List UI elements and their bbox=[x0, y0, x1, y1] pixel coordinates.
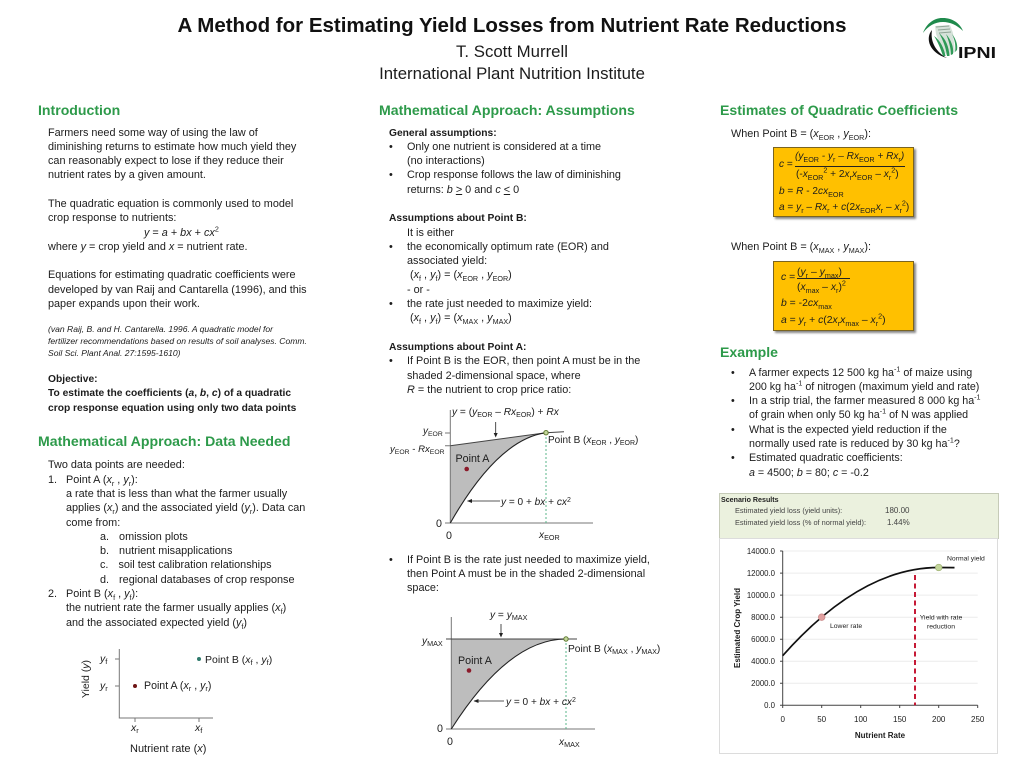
text: introduction body: diminishing returns to estimate how much yield they bbox=[48, 141, 296, 153]
chart: maximum yield shaded region: y bbox=[635, 644, 642, 655]
c symbol: c = bbox=[779, 159, 793, 170]
text: assumptions list: Crop response follows the law of diminishing bbox=[407, 169, 621, 181]
chart: EOR shaded region: y bbox=[614, 435, 621, 446]
chart: maximum yield shaded region: y = y bbox=[490, 610, 512, 621]
chart: EOR shaded region: x bbox=[539, 530, 544, 541]
chart: EOR shaded region: , bbox=[607, 435, 615, 446]
chart: estimated crop yield: 0 bbox=[780, 715, 785, 724]
chart: maximum yield shaded region bbox=[421, 610, 660, 749]
chart: points A and B: , bbox=[253, 654, 261, 666]
text: example bullets: • bbox=[731, 366, 735, 378]
chart: points A and B: f bbox=[105, 657, 108, 666]
text: assumptions list: the rate just needed to maximize yield: bbox=[407, 298, 592, 310]
c denominator: (-xEOR2 + 2xrxEOR – xr2) bbox=[796, 166, 899, 182]
text: introduction body: crop response to nutrients: bbox=[48, 212, 176, 224]
text: assumptions list: • bbox=[389, 141, 393, 153]
text: example bullets bbox=[731, 364, 981, 479]
text: assumptions list: • bbox=[389, 169, 393, 181]
heading: quadratic coefficients: Estimates of Quadratic Coefficients bbox=[720, 102, 958, 118]
chart: EOR shaded region: EOR bbox=[544, 533, 560, 542]
author and affiliation: International Plant Nutrition Institute bbox=[379, 64, 645, 82]
yield loss in units: 180.00 bbox=[885, 506, 909, 515]
chart: EOR shaded region: y bbox=[390, 444, 395, 455]
text: data needed list: c. soil test calibration relationships bbox=[100, 559, 272, 571]
text: objective: Objective: bbox=[48, 374, 98, 385]
panel: introduction bbox=[38, 102, 307, 414]
text: introduction body: developed by van Raij and Cantarella (1996), and this bbox=[48, 284, 307, 296]
text: data needed list: the nutrient rate the farmer usually applies (xf) bbox=[66, 602, 286, 617]
text: introduction body: The quadratic equation is commonly used to model bbox=[48, 198, 293, 210]
chart: estimated crop yield: 2000.0 bbox=[751, 679, 776, 688]
text: maximum yield bullet: If Point B is the rate just needed to maximize yield, bbox=[407, 554, 650, 566]
chart: EOR shaded region: EOR bbox=[430, 449, 445, 456]
chart: EOR shaded region: Point A bbox=[456, 453, 490, 465]
chart: maximum yield shaded region: MAX bbox=[427, 639, 443, 648]
chart: points A and B: y bbox=[100, 653, 105, 665]
text: assumptions list: • bbox=[389, 241, 393, 253]
text: introduction body: Farmers need some way of using the law of bbox=[48, 126, 258, 138]
chart: estimated crop yield: 100 bbox=[854, 715, 868, 724]
chart: estimated crop yield: 10000.0 bbox=[747, 591, 776, 600]
chart: EOR shaded region: Rx bbox=[546, 407, 559, 418]
c numerator: (yr – ymax) bbox=[797, 266, 842, 280]
chart: EOR shaded region: ) bbox=[635, 435, 638, 446]
text: example bullets: 200 kg ha-1 of nitrogen (maximum yield and rate) bbox=[749, 378, 979, 393]
text: assumptions list: Assumptions about Point A: bbox=[389, 342, 526, 353]
chart: points A and B: y bbox=[100, 680, 105, 692]
text: assumptions list: (no interactions) bbox=[407, 155, 485, 167]
chart: estimated crop yield bbox=[719, 538, 998, 754]
text: point B MAX condition: When Point B = (xMAX , yMAX): bbox=[731, 241, 871, 255]
yield loss in units: Estimated yield loss (yield units): bbox=[735, 506, 842, 515]
chart: estimated crop yield: 0.0 bbox=[764, 701, 776, 710]
chart: points A and B: x bbox=[131, 722, 136, 734]
text: maximum yield bullet: space: bbox=[407, 582, 439, 594]
text: data needed list: and the associated expected yield (yf) bbox=[66, 617, 247, 631]
text: data needed list: a rate that is less than what the farmer usually bbox=[66, 488, 287, 500]
text: assumptions list: (xf , yf) = (xMAX , yMAX) bbox=[410, 312, 512, 327]
title: A Method for Estimating Yield Losses from Nutrient Rate Reductions bbox=[178, 14, 846, 37]
heading: example: Example bbox=[720, 344, 778, 360]
chart: points A and B: Yield (y) bbox=[80, 660, 92, 698]
text: data needed list: applies (xr) and the associated yield (yr). Data can bbox=[66, 502, 305, 516]
text: introduction body: can reasonably expect to lose if they reduce their bbox=[48, 155, 284, 167]
chart: estimated crop yield: Nutrient Rate bbox=[855, 731, 906, 740]
chart: points A and B: f bbox=[251, 658, 254, 667]
text: assumptions list: associated yield: bbox=[407, 255, 487, 267]
a formula: a = yr + c(2xrxmax – xr2) bbox=[781, 312, 886, 328]
chart: estimated crop yield: Lower rate bbox=[830, 623, 862, 630]
scenario heading: Scenario Results bbox=[721, 496, 779, 504]
chart: points A and B: r bbox=[205, 684, 208, 693]
chart: points A and B: Point B (x bbox=[205, 654, 251, 666]
chart: maximum yield shaded region: 0 bbox=[437, 723, 443, 735]
chart: points A and B: Point A (x bbox=[144, 680, 189, 692]
chart: maximum yield shaded region: Point B (x bbox=[568, 644, 612, 655]
chart: EOR shaded region: EOR bbox=[516, 412, 531, 419]
text: introduction body: where y = crop yield and x = nutrient rate. bbox=[48, 241, 248, 253]
text: objective bbox=[48, 374, 296, 414]
chart: estimated crop yield: 12000.0 bbox=[747, 569, 776, 578]
chart: estimated crop yield: Estimated Crop Yield bbox=[733, 588, 742, 668]
text: introduction body: y = a + bx + cx2 bbox=[144, 224, 219, 239]
chart: EOR shaded region: EOR bbox=[591, 440, 607, 447]
text: assumptions list: Assumptions about Point B: bbox=[389, 213, 527, 224]
chart: EOR shaded region: y bbox=[423, 426, 428, 437]
chart: points A and B: r bbox=[105, 684, 108, 693]
chart: maximum yield shaded region: y bbox=[422, 636, 427, 647]
chart: maximum yield shaded region: MAX bbox=[612, 647, 628, 656]
chart: maximum yield shaded region: 0 bbox=[447, 736, 453, 748]
chart: points A and B: ) bbox=[269, 654, 272, 666]
chart: estimated crop yield: 4000.0 bbox=[751, 657, 776, 666]
text: assumptions list: • bbox=[389, 298, 393, 310]
text: example bullets: • bbox=[731, 395, 735, 407]
text: assumptions list bbox=[389, 128, 640, 396]
chart: EOR shaded region: ) + bbox=[531, 407, 546, 418]
panel: assumptions bbox=[379, 102, 660, 749]
text: data needed list: a. omission plots bbox=[100, 531, 188, 543]
chart: EOR shaded region: y = 0 + bx + cx bbox=[501, 497, 567, 508]
chart: EOR shaded region: y = (y bbox=[452, 407, 477, 418]
chart: points A and B: x bbox=[195, 722, 200, 734]
heading: data needed: Mathematical Approach: Data Needed bbox=[38, 433, 290, 449]
heading: introduction: Introduction bbox=[38, 102, 120, 118]
chart: points A and B: y bbox=[199, 680, 206, 692]
c symbol: c = bbox=[781, 272, 795, 283]
chart: points A and B: y bbox=[260, 654, 267, 666]
text: data needed list: b. nutrient misapplications bbox=[100, 545, 232, 557]
icon: IPNI logo: IPNI bbox=[958, 45, 996, 62]
chart: EOR shaded region: Rx bbox=[418, 444, 430, 455]
text: assumptions list: If Point B is the EOR, then point A must be in the bbox=[407, 355, 640, 367]
chart: EOR shaded region: – bbox=[492, 407, 504, 418]
author and affiliation: T. Scott Murrell bbox=[456, 42, 568, 61]
chart: EOR shaded region: Rx bbox=[504, 407, 516, 418]
chart: EOR shaded region: 0 bbox=[436, 518, 442, 530]
chart: estimated crop yield: 50 bbox=[817, 715, 827, 724]
chart: maximum yield shaded region: MAX bbox=[641, 647, 657, 656]
chart: points A and B: , bbox=[191, 680, 200, 692]
text: example bullets: normally used rate is reduced by 30 kg ha-1? bbox=[749, 435, 960, 450]
text: citation: fertilizer recommendations based on results of soil analyses. Comm. bbox=[48, 336, 307, 346]
chart: EOR shaded region bbox=[390, 407, 638, 542]
chart: EOR shaded region: - bbox=[410, 444, 418, 455]
c numerator: (yEOR - yr – RxEOR + Rxr) bbox=[795, 151, 904, 164]
text: objective: To estimate the coefficients (a, b, c) of a quadratic bbox=[48, 388, 291, 399]
icon: IPNI logo bbox=[923, 18, 996, 62]
chart: points A and B bbox=[80, 649, 272, 755]
chart: EOR shaded region: EOR bbox=[620, 440, 635, 447]
text: assumptions list: returns: b > 0 and c < 0 bbox=[407, 184, 519, 196]
chart: EOR shaded region: EOR bbox=[477, 412, 492, 419]
chart: maximum yield shaded region: MAX bbox=[564, 740, 580, 749]
text: assumptions list: (xf , yf) = (xEOR , yEOR) bbox=[410, 269, 512, 284]
chart: maximum yield shaded region: Point A bbox=[458, 655, 493, 667]
chart: estimated crop yield: reduction bbox=[927, 624, 955, 630]
a formula: a = yr – Rxr + c(2xEORxr – xr2) bbox=[779, 199, 909, 215]
text: point B EOR condition: When Point B = (xEOR , yEOR): bbox=[731, 128, 871, 142]
chart: EOR shaded region: EOR bbox=[428, 431, 443, 438]
callout: MAX formulas bbox=[773, 261, 914, 331]
text: citation: (van Raij, B. and H. Cantarella. 1996. A quadratic model for bbox=[48, 324, 273, 334]
text: assumptions list: R = the nutrient to crop price ratio: bbox=[407, 384, 571, 396]
text: introduction body: paper expands upon their work. bbox=[48, 298, 200, 310]
chart: points A and B: ) bbox=[208, 680, 211, 692]
yield loss in units bbox=[735, 506, 910, 515]
text: example bullets: of grain when only 50 kg ha-1 of N was applied bbox=[749, 407, 968, 421]
text: assumptions list: - or - bbox=[407, 284, 430, 296]
panel: scenario results bbox=[719, 493, 999, 539]
chart: estimated crop yield: Normal yield bbox=[947, 556, 985, 562]
chart: maximum yield shaded region: 2 bbox=[572, 697, 576, 704]
chart: estimated crop yield: 250 bbox=[971, 715, 985, 724]
chart: estimated crop yield: 14000.0 bbox=[747, 547, 776, 556]
chart: estimated crop yield: Yield with rate bbox=[920, 614, 962, 622]
chart: maximum yield shaded region: y = 0 + bx + cx bbox=[506, 697, 572, 708]
text: assumptions list: the economically optimum rate (EOR) and bbox=[407, 241, 609, 253]
text: introduction body bbox=[48, 126, 307, 310]
chart: EOR shaded region: Point B (x bbox=[548, 435, 591, 446]
text: example bullets: A farmer expects 12 500 kg ha-1 of maize using bbox=[749, 364, 972, 378]
callout: EOR formulas bbox=[773, 147, 914, 217]
chart: estimated crop yield: 6000.0 bbox=[751, 635, 776, 644]
author and affiliation bbox=[379, 42, 645, 82]
text: introduction body: Equations for estimating quadratic coefficients were bbox=[48, 269, 296, 281]
text: example bullets: a = 4500; b = 80; c = -0.2 bbox=[749, 467, 869, 479]
chart: estimated crop yield: 200 bbox=[932, 715, 946, 724]
chart: EOR shaded region: EOR bbox=[395, 449, 410, 456]
text: introduction body: nutrient rates by a given amount. bbox=[48, 169, 206, 181]
text: data needed list bbox=[48, 459, 305, 631]
text: citation: Soil Sci. Plant Anal. 27:1595-1610) bbox=[48, 348, 180, 358]
chart: points A and B: Nutrient rate (x) bbox=[130, 743, 206, 755]
chart: EOR shaded region: 2 bbox=[567, 497, 571, 504]
chart: points A and B: f bbox=[200, 726, 203, 735]
text: data needed list: come from: bbox=[66, 517, 120, 529]
text: assumptions list: Only one nutrient is considered at a time bbox=[407, 141, 601, 153]
yield loss in percent: 1.44% bbox=[887, 518, 910, 527]
text: assumptions list: • bbox=[389, 355, 393, 367]
text: example bullets: What is the expected yield reduction if the bbox=[749, 424, 947, 436]
chart: maximum yield shaded region: x bbox=[559, 737, 564, 748]
chart: maximum yield shaded region: MAX bbox=[512, 613, 528, 622]
heading: assumptions: Mathematical Approach: Assumptions bbox=[379, 102, 635, 118]
text: assumptions list: shaded 2-dimensional space, where bbox=[407, 370, 581, 382]
chart: maximum yield shaded region: ) bbox=[657, 644, 660, 655]
text: citation bbox=[48, 324, 307, 358]
text: assumptions list: It is either bbox=[407, 227, 454, 239]
chart: points A and B: r bbox=[136, 726, 139, 735]
text: example bullets: • bbox=[731, 452, 735, 464]
panel: data needed bbox=[38, 433, 305, 755]
text: assumptions list: General assumptions: bbox=[389, 128, 497, 138]
panel: example bbox=[720, 344, 981, 479]
text: objective: crop response equation using only two data points bbox=[48, 403, 296, 414]
yield loss in percent: Estimated yield loss (% of normal yield): bbox=[735, 518, 866, 527]
text: data needed list: 2. Point B (xf , yf): bbox=[48, 588, 138, 602]
text: example bullets: • bbox=[731, 424, 735, 436]
text: maximum yield bullet: • bbox=[389, 554, 393, 566]
text: example bullets: Estimated quadratic coefficients: bbox=[749, 452, 903, 464]
text: data needed list: d. regional databases of crop response bbox=[100, 574, 294, 586]
b formula: b = R - 2cxEOR bbox=[779, 186, 844, 199]
text: data needed list: Two data points are needed: bbox=[48, 459, 185, 471]
b formula: b = -2cxmax bbox=[781, 298, 832, 311]
chart: points A and B: f bbox=[267, 658, 270, 667]
chart: estimated crop yield: 150 bbox=[893, 715, 907, 724]
chart: EOR shaded region: 0 bbox=[446, 530, 452, 542]
panel: quadratic coefficients bbox=[720, 102, 958, 334]
chart: maximum yield shaded region: , bbox=[628, 644, 636, 655]
text: example bullets: In a strip trial, the farmer measured 8 000 kg ha-1 bbox=[749, 393, 981, 407]
chart: points A and B: r bbox=[189, 684, 192, 693]
text: data needed list: 1. Point A (xr , yr): bbox=[48, 474, 138, 488]
c denominator: (xmax – xr)2 bbox=[797, 279, 846, 295]
text: maximum yield bullet bbox=[389, 554, 650, 594]
chart: estimated crop yield: 8000.0 bbox=[751, 613, 776, 622]
text: maximum yield bullet: then Point A must be in the shaded 2-dimensional bbox=[407, 568, 645, 580]
